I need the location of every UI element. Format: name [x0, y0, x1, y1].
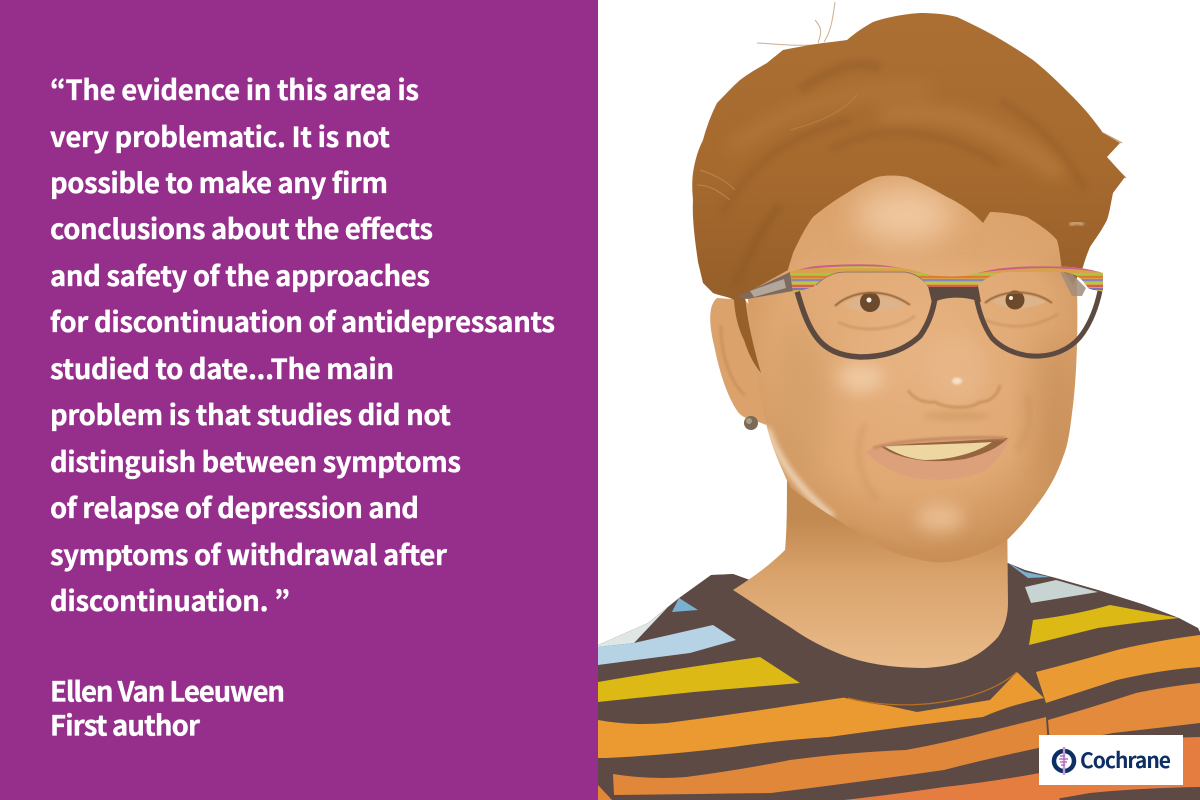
lens rims — [797, 288, 936, 357]
photo: portrait of Ellen Van Leeuwen — [598, 2, 1200, 800]
glasses — [737, 260, 1106, 357]
stray hair wisps — [757, 2, 835, 45]
ear — [710, 298, 772, 425]
quote text block: problem is that studies did not — [50, 393, 451, 433]
attribution — [50, 670, 285, 744]
quote text block: and safety of the approaches — [50, 254, 430, 294]
forehead area — [1055, 242, 1058, 244]
quote text block: for discontinuation of antidepressants — [50, 300, 555, 340]
shirt — [598, 560, 1200, 800]
quote text block: symptoms of withdrawal after — [50, 533, 448, 573]
colourful brow bar — [790, 264, 1103, 293]
quote text block: distinguish between symptoms — [50, 440, 461, 480]
jaw highlight — [767, 428, 833, 517]
hair — [692, 2, 1126, 373]
quote text block: discontinuation. ” — [50, 579, 290, 619]
quote text block: very problematic. It is not — [50, 115, 390, 155]
mouth creases — [862, 432, 863, 433]
panel: quote — [0, 0, 598, 800]
icon: Cochrane logo mark — [1054, 747, 1074, 775]
quote text block — [50, 68, 555, 619]
quote text block: studied to date...The main — [50, 347, 394, 387]
nose — [940, 346, 981, 397]
face — [745, 160, 1080, 562]
chin underside shade — [1008, 536, 1011, 540]
icon: earring — [744, 416, 758, 430]
neck — [733, 470, 1008, 668]
temple arm — [737, 272, 793, 299]
collar — [711, 563, 1029, 707]
eyes — [843, 296, 904, 312]
nose bridge — [928, 286, 981, 303]
mouth — [866, 436, 1010, 480]
quote text block: of relapse of depression and — [50, 486, 419, 526]
right hinge — [1060, 272, 1086, 296]
logo: Cochrane — [1039, 735, 1183, 785]
wordmark: Cochrane — [1080, 745, 1171, 775]
attribution: Ellen Van Leeuwen — [50, 670, 285, 710]
attribution: First author — [50, 704, 201, 744]
quote text block: conclusions about the effects — [50, 207, 433, 247]
quote text block: possible to make any firm — [50, 161, 388, 201]
quote text block: “The evidence in this area is — [50, 68, 419, 108]
